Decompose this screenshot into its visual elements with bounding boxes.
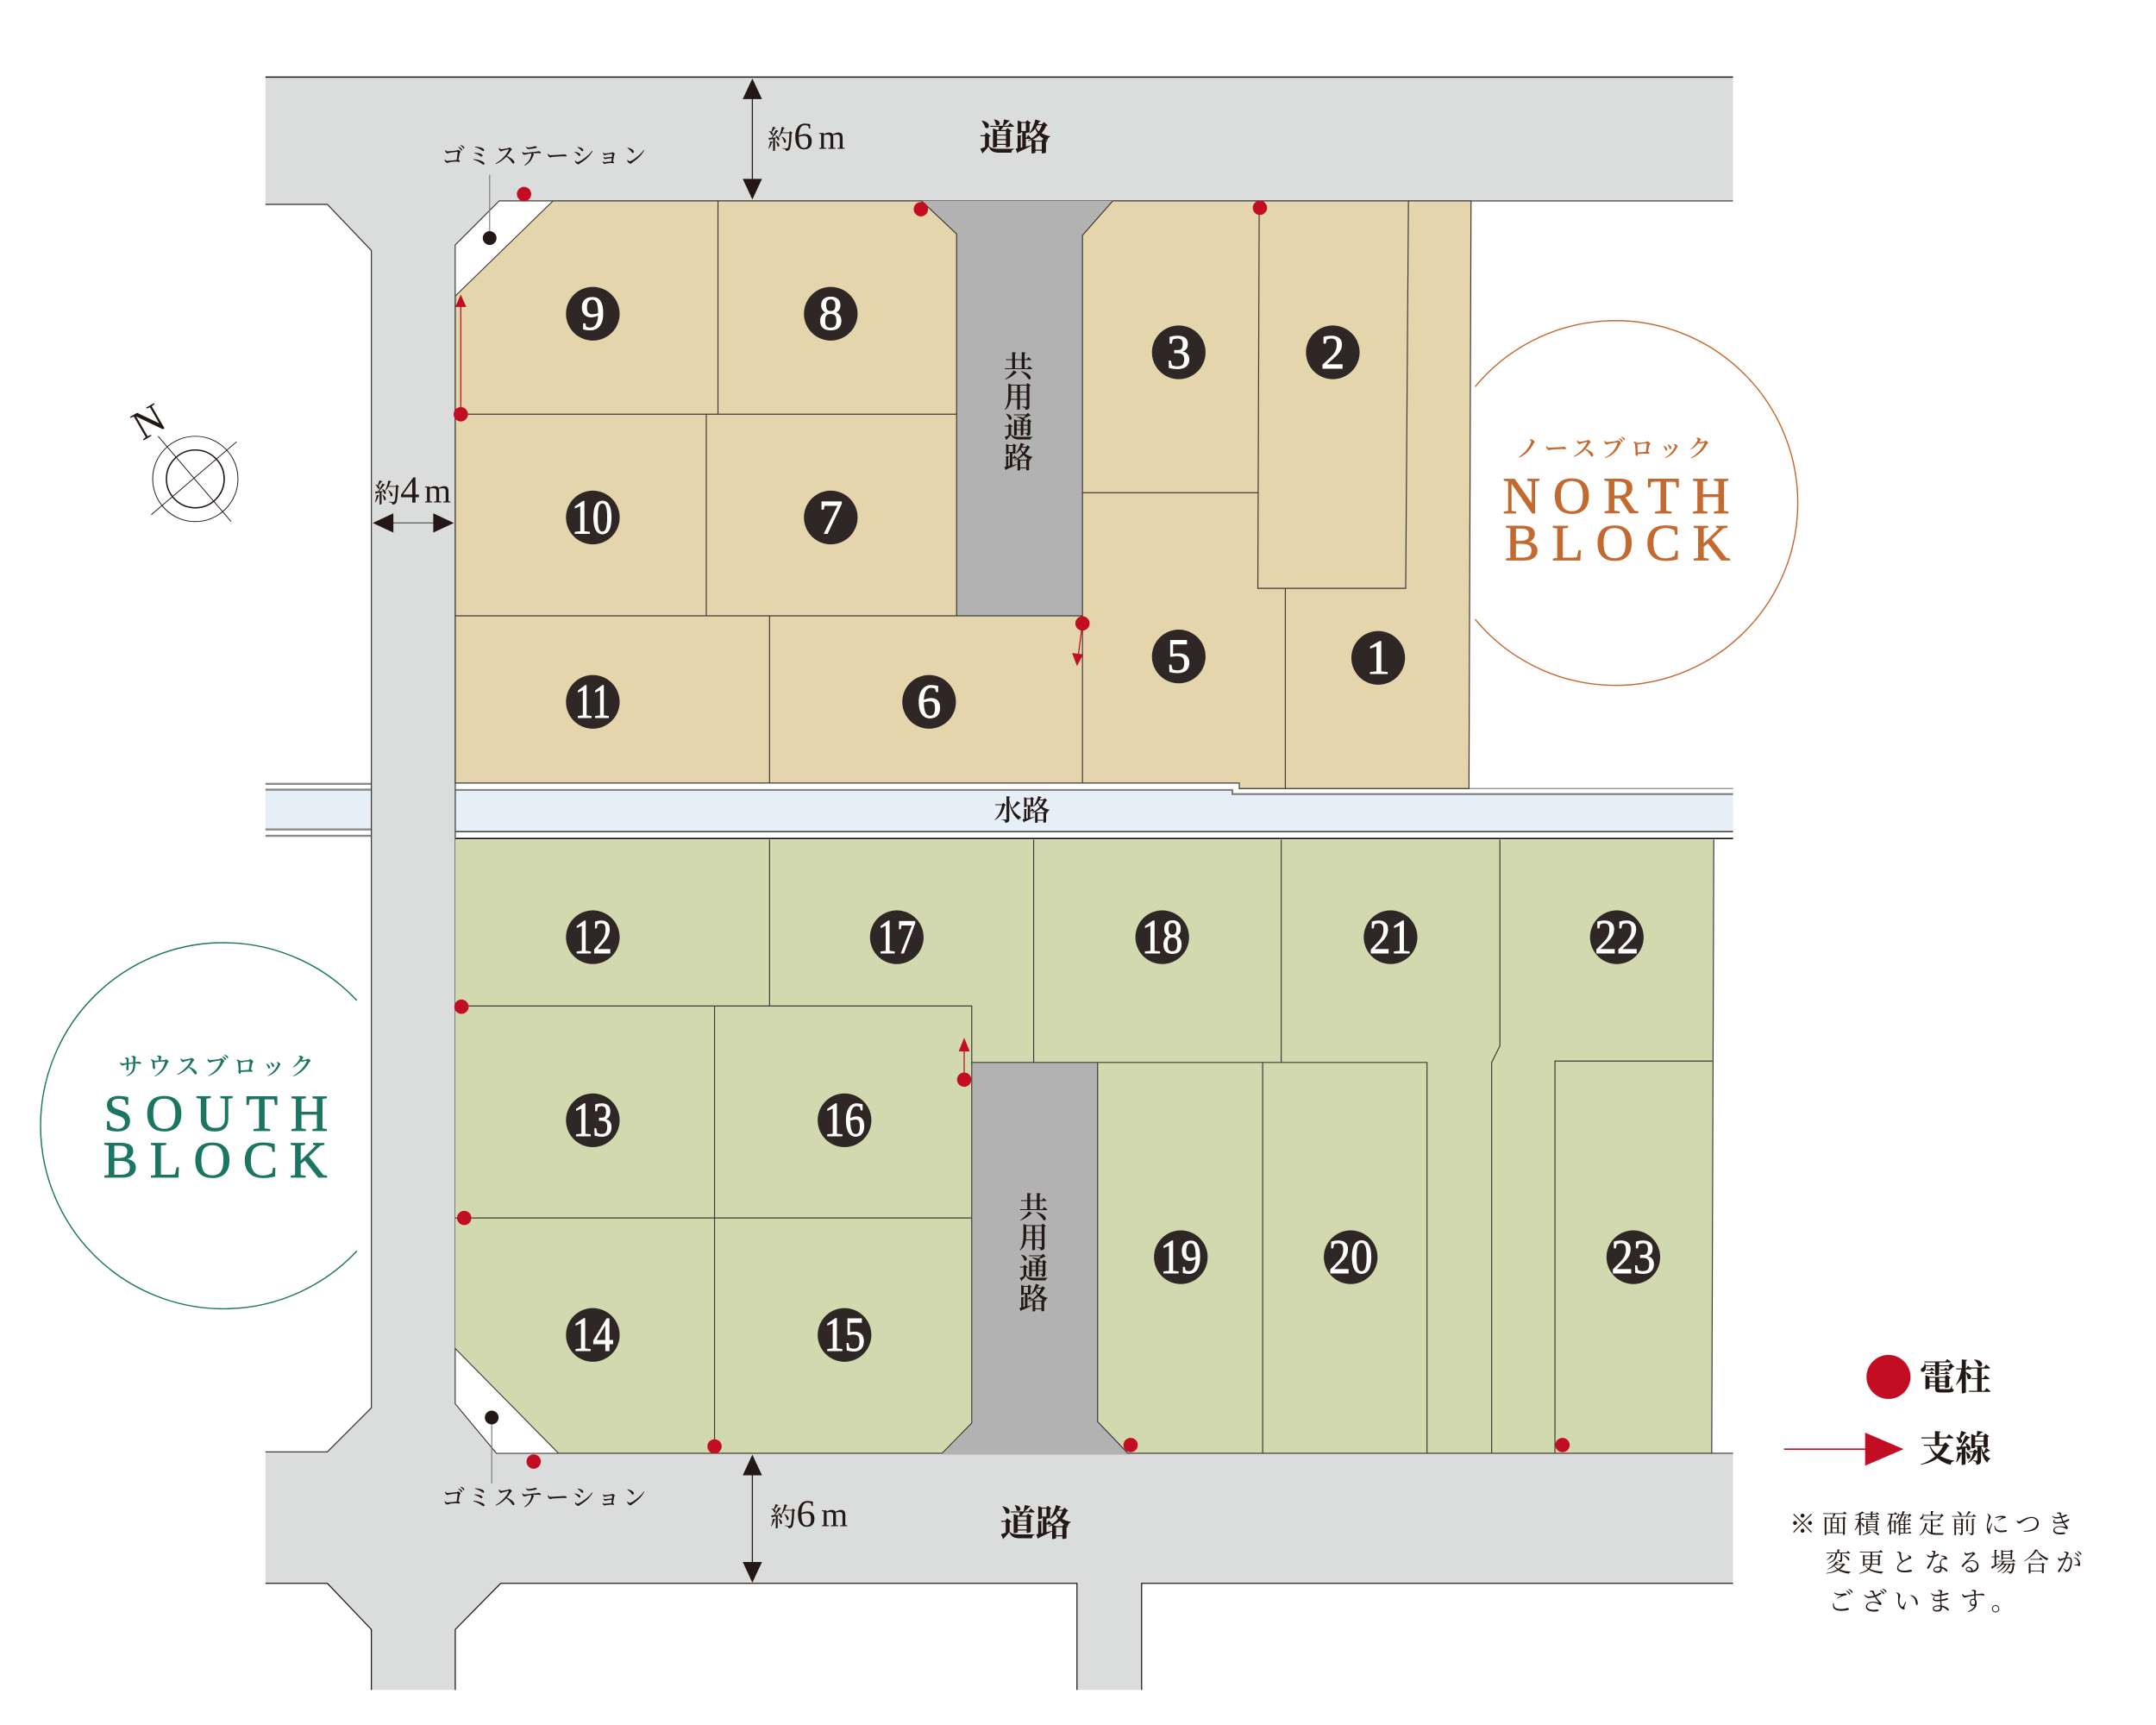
arrow: road width top: 約6m xyxy=(768,114,845,157)
lot numbers: 11 xyxy=(575,675,611,729)
shared road: south: 路 xyxy=(1018,1283,1049,1315)
compass xyxy=(124,395,238,522)
north block badge: BLOCK xyxy=(1505,514,1731,572)
utility poles and guy wires xyxy=(454,187,1570,1469)
lot numbers: 12 xyxy=(573,911,612,964)
lot numbers: 16 xyxy=(824,1094,865,1147)
shared road: north: 共 xyxy=(1004,351,1034,384)
lot numbers: 21 xyxy=(1369,911,1412,964)
south block badge xyxy=(41,943,357,1308)
lot numbers: 15 xyxy=(824,1308,865,1362)
lot numbers: 22 xyxy=(1595,911,1639,964)
legend: guy wire xyxy=(1784,1430,1991,1470)
arrow: side road width xyxy=(373,467,454,533)
note: ※面積確定前につき xyxy=(1789,1510,2080,1540)
shared road: south: 用 xyxy=(1018,1222,1049,1255)
legend: guy wire: 支線 xyxy=(1920,1430,1991,1470)
lot numbers: 8 xyxy=(818,287,843,341)
shared road: north: 用 xyxy=(1004,381,1033,414)
lot numbers: 13 xyxy=(573,1094,613,1147)
legend: utility pole: 電柱 xyxy=(1920,1358,1991,1398)
lot numbers: 9 xyxy=(580,287,605,341)
panel: north block lots xyxy=(455,201,1471,788)
arrow: road width bottom: 約6m xyxy=(770,1492,848,1535)
south block badge: BLOCK xyxy=(103,1132,328,1189)
note xyxy=(1789,1510,2090,1616)
note: 変更となる場合が xyxy=(1825,1548,2090,1578)
lot numbers: 19 xyxy=(1160,1231,1201,1284)
shared road: south xyxy=(943,1063,1129,1455)
lot numbers: 7 xyxy=(818,491,843,544)
note: ございます。 xyxy=(1828,1587,2024,1616)
arrow: road width bottom xyxy=(743,1455,848,1583)
arrow: road width top xyxy=(743,78,845,199)
lot numbers: 10 xyxy=(572,491,613,544)
compass: N xyxy=(124,395,173,449)
lot numbers: 5 xyxy=(1167,630,1191,683)
legend: utility pole xyxy=(1866,1355,1991,1399)
road label top: 道路 xyxy=(980,118,1051,158)
lot numbers: 20 xyxy=(1329,1231,1373,1284)
shared road: south: 通 xyxy=(1018,1252,1049,1285)
lot numbers: 3 xyxy=(1167,326,1191,380)
shared road: north xyxy=(922,201,1112,616)
south block badge: SOUTH xyxy=(103,1085,328,1143)
lot numbers xyxy=(566,287,1660,1362)
lot numbers: 14 xyxy=(572,1308,613,1362)
north block badge xyxy=(1476,321,1798,686)
lot numbers: 1 xyxy=(1366,631,1390,685)
south block badge: サウスブロック xyxy=(119,1053,319,1081)
garbage station north: ゴミステーション xyxy=(442,143,649,169)
lot numbers: 23 xyxy=(1611,1231,1655,1284)
shared road: north: 路 xyxy=(1004,442,1033,475)
shared road: north: 通 xyxy=(1004,411,1033,444)
label: waterway: 水路 xyxy=(993,795,1050,827)
panel: south block lots xyxy=(455,839,1714,1455)
road label bottom: 道路 xyxy=(1000,1504,1071,1544)
lot numbers: 6 xyxy=(917,675,941,729)
lot numbers: 17 xyxy=(878,911,916,964)
garbage station north xyxy=(442,143,649,296)
north block badge: NORTH xyxy=(1502,467,1730,525)
garbage station south xyxy=(442,1349,649,1511)
shared road: south: 共 xyxy=(1018,1192,1049,1225)
arrow: side road width: 約4m xyxy=(374,467,451,511)
garbage station south: ゴミステーション xyxy=(442,1485,649,1511)
north block badge: ノースブロック xyxy=(1516,436,1716,463)
lot numbers: 18 xyxy=(1142,911,1183,964)
road network xyxy=(266,77,1733,1690)
waterway xyxy=(266,784,1733,838)
lot numbers: 2 xyxy=(1320,326,1344,380)
